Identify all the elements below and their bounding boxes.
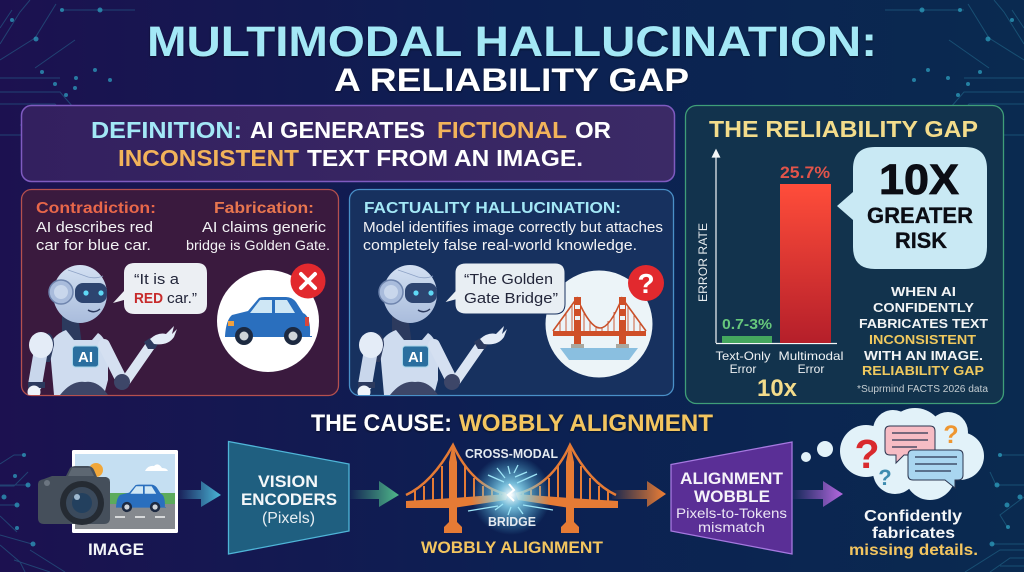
speech bubble: red car bbox=[113, 263, 207, 314]
bar: multimodal bbox=[780, 184, 831, 343]
definition text: INCONSISTENT bbox=[118, 145, 300, 171]
explanatory text bbox=[859, 284, 988, 378]
cloud bbox=[840, 408, 984, 500]
icon: broken golden gate bridge bbox=[406, 443, 618, 535]
text: confidently fabricates missing details: fabricates bbox=[872, 525, 955, 542]
panel: vision encoders: (Pixels) bbox=[262, 510, 315, 527]
contradiction text: AI describes red bbox=[36, 219, 153, 236]
title bbox=[147, 18, 877, 98]
explanatory text: RELIABILITY GAP bbox=[862, 363, 984, 378]
circuit decoration: top left bbox=[0, 0, 135, 160]
definition text: DEFINITION: bbox=[91, 117, 242, 143]
value: 0.7-3%: 0.7-3% bbox=[722, 316, 772, 333]
question marks: ? bbox=[943, 421, 959, 449]
category labels: Error bbox=[798, 362, 824, 376]
category labels: Multimodal bbox=[778, 349, 844, 363]
icon: thought cloud with confused responses bbox=[801, 408, 984, 500]
icon: red question badge: ? bbox=[637, 268, 655, 299]
category labels: Error bbox=[730, 362, 756, 376]
panel: factuality hallucination bbox=[350, 190, 674, 398]
panel: the reliability gap bbox=[686, 106, 1004, 404]
y axis arrow bbox=[712, 150, 720, 343]
text: confidently fabricates missing details bbox=[849, 508, 978, 559]
camera bbox=[38, 466, 110, 525]
definition text: TEXT FROM AN IMAGE. bbox=[307, 145, 583, 171]
circuit decoration: bottom right bbox=[965, 453, 1024, 572]
panel: contradiction and fabrication bbox=[22, 190, 338, 398]
explanatory text: WITH AN IMAGE. bbox=[864, 348, 983, 363]
speech bubble: red car: “It is a bbox=[134, 271, 180, 288]
title line 1: MULTIMODAL HALLUCINATION: bbox=[147, 18, 877, 66]
text: confidently fabricates missing details: Confidently bbox=[864, 508, 962, 525]
icon: robot: AI bbox=[78, 349, 93, 366]
panel: alignment wobble: Pixels-to-Tokens bbox=[676, 505, 787, 521]
arrow: image to encoders bbox=[178, 481, 221, 507]
10x label: 10x bbox=[757, 375, 798, 402]
factuality text: Model identifies image correctly but attaches bbox=[363, 219, 663, 236]
callout: 10x greater risk: RISK bbox=[895, 228, 947, 253]
heading: the cause: THE CAUSE: bbox=[311, 410, 452, 437]
definition text: OR bbox=[575, 117, 611, 143]
speech bubble: red car: RED bbox=[134, 290, 163, 307]
panel: alignment wobble: ALIGNMENT bbox=[680, 469, 784, 488]
question marks: ? bbox=[878, 465, 892, 490]
contradiction text: car for blue car. bbox=[36, 237, 151, 254]
arrow: wobble to fabrication bbox=[793, 481, 843, 507]
text: confidently fabricates missing details: missing details. bbox=[849, 542, 978, 559]
explanatory text: WHEN AI bbox=[891, 284, 956, 299]
panel: vision encoders: VISION bbox=[258, 472, 318, 491]
panel: alignment wobble bbox=[671, 442, 792, 554]
arrow: bridge to alignment wobble bbox=[612, 481, 666, 507]
circuit decoration: bottom left bbox=[0, 453, 65, 572]
axis label: ERROR RATE bbox=[698, 223, 710, 302]
bar chart bbox=[698, 150, 844, 402]
fabrication text: Fabrication: bbox=[214, 200, 314, 217]
chat bubble: pink bbox=[885, 426, 935, 463]
speech bubble: golden gate: Gate Bridge” bbox=[464, 290, 558, 307]
panel heading: THE RELIABILITY GAP bbox=[709, 116, 978, 142]
label: bridge: BRIDGE bbox=[488, 515, 536, 529]
contradiction text: Contradiction: bbox=[36, 200, 156, 217]
panel: alignment wobble: WOBBLE bbox=[694, 487, 770, 506]
callout: 10x greater risk bbox=[837, 147, 987, 269]
question marks bbox=[854, 421, 959, 490]
category labels: Text-Only bbox=[716, 349, 770, 363]
chat bubble: blue bbox=[908, 450, 963, 488]
callout: 10x greater risk: GREATER bbox=[867, 203, 973, 228]
definition text bbox=[91, 117, 611, 171]
speech bubble: golden gate: “The Golden bbox=[464, 271, 553, 288]
icon: golden gate bridge in circle bbox=[546, 270, 652, 378]
photo frame bbox=[72, 450, 178, 533]
icon: robot bbox=[358, 265, 507, 398]
panel: alignment wobble: mismatch bbox=[698, 519, 765, 535]
icon: red x badge bbox=[290, 264, 326, 298]
circuit decoration: top right bbox=[885, 0, 1024, 160]
icon: robot: AI bbox=[408, 349, 423, 366]
factuality text: FACTUALITY HALLUCINATION: bbox=[364, 200, 621, 217]
category labels bbox=[716, 349, 844, 376]
explanatory text: CONFIDENTLY bbox=[873, 300, 974, 315]
contradiction text bbox=[36, 200, 156, 254]
callout: 10x greater risk: 10X bbox=[879, 156, 959, 204]
definition text: FICTIONAL bbox=[437, 117, 567, 143]
question marks: ? bbox=[854, 431, 880, 477]
label: wobbly alignment: WOBBLY ALIGNMENT bbox=[421, 539, 603, 557]
footnote: *Suprmind FACTS 2026 data bbox=[857, 384, 988, 395]
bar: text-only bbox=[722, 336, 772, 343]
panel: definition bbox=[22, 106, 674, 182]
explanatory text: FABRICATES TEXT bbox=[859, 316, 988, 331]
definition text: AI GENERATES bbox=[250, 117, 425, 143]
fabrication text: bridge is Golden Gate. bbox=[186, 237, 330, 253]
value: 25.7%: 25.7% bbox=[780, 163, 830, 182]
label: cross-modal: CROSS-MODAL bbox=[465, 447, 558, 461]
speech bubble: golden gate bbox=[444, 263, 565, 314]
explanatory text: INCONSISTENT bbox=[869, 332, 976, 347]
factuality text: completely false real-world knowledge. bbox=[363, 237, 637, 254]
arrow: encoders to bridge bbox=[350, 481, 399, 507]
label: image: IMAGE bbox=[88, 541, 144, 559]
heading: the cause: WOBBLY ALIGNMENT bbox=[459, 410, 713, 437]
panel: vision encoders bbox=[228, 442, 349, 554]
icon: blue car in circle bbox=[217, 270, 319, 372]
icon: image with camera bbox=[38, 450, 178, 533]
thought dots bbox=[801, 441, 833, 462]
icon: red question badge bbox=[628, 265, 664, 301]
icon: robot bbox=[28, 265, 177, 398]
panel: vision encoders: ENCODERS bbox=[241, 490, 337, 509]
heading: the cause bbox=[311, 410, 713, 437]
factuality text bbox=[363, 200, 663, 254]
fabrication text: AI claims generic bbox=[202, 219, 327, 236]
fabrication text bbox=[186, 200, 330, 253]
title line 2: A RELIABILITY GAP bbox=[334, 62, 689, 98]
speech bubble: red car: car.” bbox=[167, 290, 197, 307]
